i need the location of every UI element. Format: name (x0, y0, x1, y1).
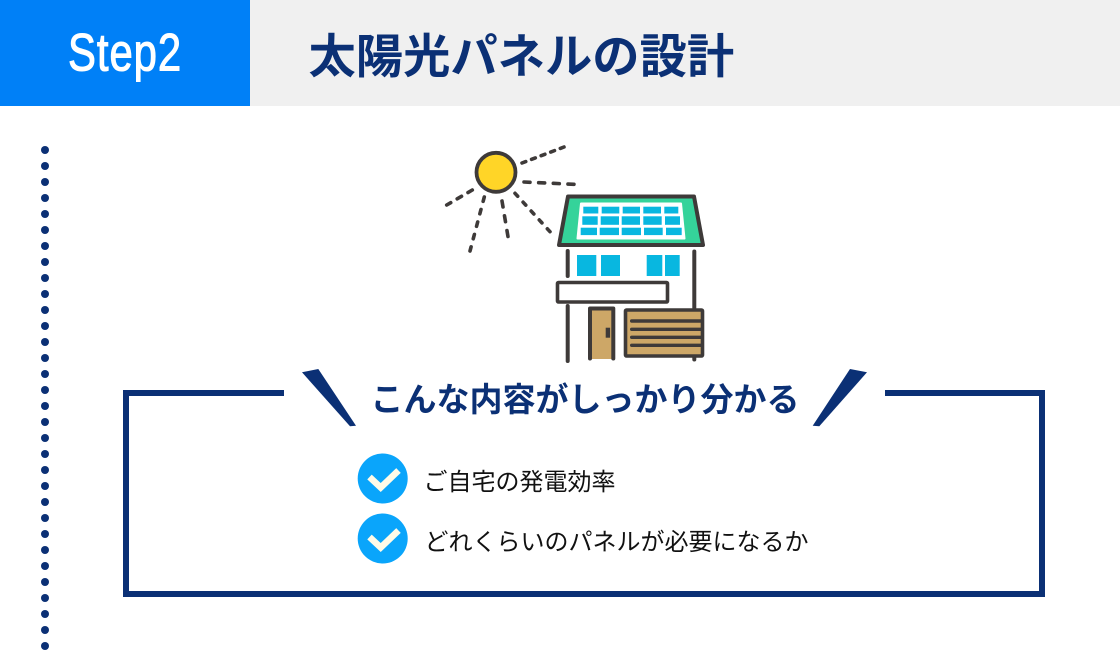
panel: content box (126, 369, 1042, 594)
step badge (0, 0, 250, 106)
box heading: こんな内容がしっかり分かる (370, 373, 800, 421)
door (590, 308, 613, 359)
right accent wedge (813, 369, 867, 426)
icon: house with solar panels (558, 196, 703, 361)
solar panel (578, 204, 684, 238)
left accent wedge (302, 369, 356, 426)
windows (577, 255, 680, 276)
checklist item 1: ご自宅の発電効率 (424, 462, 616, 497)
dotted vertical line (41, 146, 49, 650)
title: 太陽光パネルの設計 (308, 18, 734, 87)
step badge: Step2 (68, 24, 182, 83)
checklist item 2 (358, 514, 808, 564)
icon: sun with dashed rays (447, 147, 574, 251)
balcony (558, 282, 668, 302)
icon: check (358, 454, 408, 504)
roof (559, 196, 703, 245)
header bar (0, 0, 1120, 106)
icon: check (358, 514, 408, 564)
walls (568, 251, 694, 361)
checklist item 1 (358, 454, 616, 504)
garage shutter (626, 310, 702, 356)
checklist item 2: どれくらいのパネルが必要になるか (424, 522, 808, 557)
